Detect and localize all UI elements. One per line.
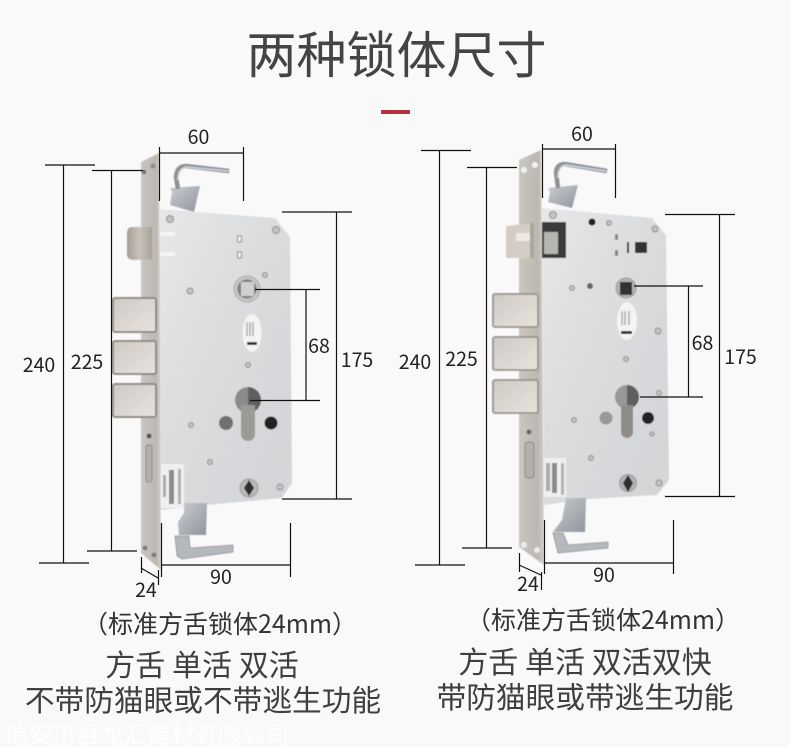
right lock: spec label (544, 458, 566, 497)
right caption: functions line 1: 方舌 单活 双活双快 (458, 638, 712, 682)
right lock: top hook (548, 164, 607, 208)
right lock: case details (542, 212, 662, 492)
panel: left lock body diagram (113, 153, 292, 570)
right dimension: 24: 24 (517, 568, 539, 597)
right caption: standard size: （标准方舌锁体24mm） (466, 601, 740, 637)
left lock: case details (160, 216, 283, 497)
right dimension: 60: 60 (571, 118, 593, 147)
left lock: spec label (161, 464, 184, 508)
left dimension: 90: 90 (210, 561, 232, 590)
left lock: faceplate (141, 153, 161, 570)
right lock: faceplate (519, 150, 544, 565)
red accent bar (381, 110, 410, 114)
left dimension: 68: 68 (308, 330, 330, 359)
panel: right lock body diagram (493, 150, 669, 565)
left lock: latch bolt (127, 227, 152, 260)
right dimension: 68: 68 (692, 327, 713, 356)
panel: left dimension lines (39, 147, 352, 585)
left dimension: 175: 175 (341, 344, 373, 373)
right dimension: 175: 175 (724, 341, 757, 370)
left caption: standard size: （标准方舌锁体24mm） (83, 605, 357, 641)
left lock: three square bolts (113, 298, 156, 417)
left dimension: 60: 60 (188, 121, 209, 150)
right caption: functions line 2: 带防猫眼或带逃生功能 (437, 674, 733, 717)
left dimension: 24: 24 (135, 574, 157, 603)
right lock: case plate (542, 208, 669, 505)
right lock: bottom hook (553, 498, 608, 553)
left caption: functions line 2: 不带防猫眼或不带逃生功能 (25, 677, 381, 720)
left lock: top hook (170, 166, 229, 212)
left caption: functions line 1: 方舌 单活 双活 (105, 641, 299, 685)
left lock: case plate (159, 209, 292, 510)
right dimension: 225: 225 (445, 343, 478, 372)
left dimension: 225: 225 (71, 346, 103, 375)
panel: right dimension lines (415, 144, 735, 590)
left lock: bottom hook (175, 503, 233, 559)
right dimension: 90: 90 (593, 559, 615, 588)
title: 两种锁体尺寸 (246, 16, 546, 88)
right dimension: 240: 240 (399, 346, 431, 375)
right lock: deadlatch (506, 223, 534, 258)
right lock: three square bolts (493, 294, 538, 413)
left dimension: 240: 240 (23, 349, 55, 378)
